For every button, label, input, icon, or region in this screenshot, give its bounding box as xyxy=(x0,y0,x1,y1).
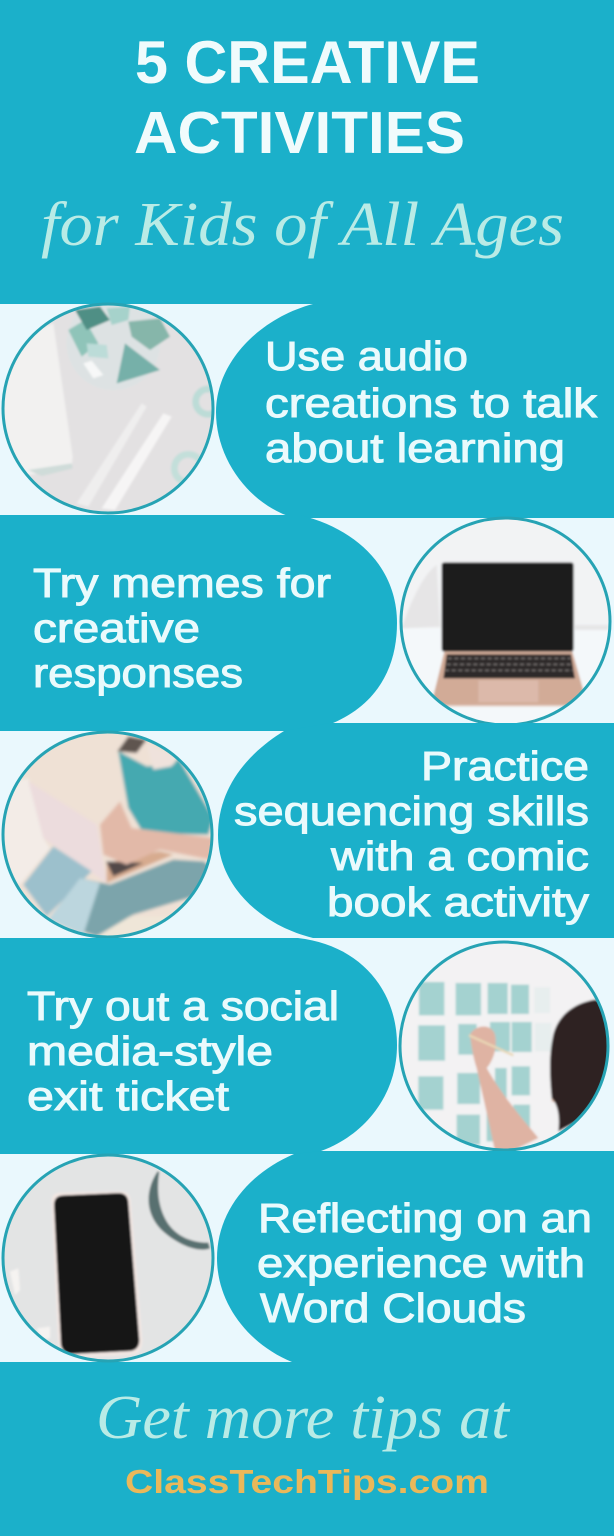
label: responses xyxy=(33,650,243,696)
panel background xyxy=(0,518,614,723)
panel background xyxy=(0,1154,320,1362)
footer call to action: Get more tips at xyxy=(96,1384,511,1452)
label xyxy=(33,560,331,696)
title xyxy=(134,29,480,166)
label: about learning xyxy=(265,425,565,471)
label: book activity xyxy=(327,879,590,925)
title: ACTIVITIES xyxy=(134,100,465,166)
teal text shape xyxy=(216,304,614,518)
photo ring xyxy=(3,1155,213,1361)
panel background xyxy=(0,938,614,1151)
panel: activity 5 xyxy=(0,1151,590,1362)
label: exit ticket xyxy=(27,1073,230,1119)
photo: desk supplies xyxy=(4,306,212,512)
panel: activity 2 xyxy=(33,516,614,723)
panel background xyxy=(0,731,614,938)
photo ring xyxy=(3,304,213,513)
panel: activity 1 xyxy=(0,302,598,515)
photo ring xyxy=(401,518,610,725)
footer website: ClassTechTips.com xyxy=(125,1463,489,1500)
teal text shape xyxy=(218,723,614,938)
label: creative xyxy=(33,605,200,651)
label: creations to talk xyxy=(265,380,598,426)
label: Try out a social xyxy=(27,983,339,1029)
label: with a comic xyxy=(330,833,589,879)
panel: activity 3 xyxy=(0,723,590,938)
label xyxy=(27,983,339,1119)
photo ring xyxy=(3,732,212,937)
panel: activity 4 xyxy=(27,938,614,1151)
photo ring xyxy=(400,942,608,1150)
label: Use audio xyxy=(265,333,468,379)
panel background xyxy=(0,304,614,515)
teal text shape xyxy=(217,1151,614,1362)
teal text shape xyxy=(0,938,397,1151)
label: Reflecting on an xyxy=(258,1195,592,1241)
label: Try memes for xyxy=(33,560,331,606)
label: experience with xyxy=(257,1240,585,1286)
label: media-style xyxy=(27,1028,273,1074)
title: 5 CREATIVE xyxy=(135,29,480,96)
teal text shape xyxy=(0,515,397,723)
photo: sticky notes xyxy=(402,944,606,1148)
label: sequencing skills xyxy=(234,788,589,834)
label: Word Clouds xyxy=(260,1285,526,1331)
photo: laptop xyxy=(402,520,608,723)
label xyxy=(265,333,598,471)
label: Practice xyxy=(421,743,589,789)
subtitle: for Kids of All Ages xyxy=(41,191,564,259)
label xyxy=(257,1195,592,1331)
photo: person on laptop xyxy=(4,734,210,936)
photo: phone xyxy=(4,1156,212,1360)
label xyxy=(234,743,590,925)
